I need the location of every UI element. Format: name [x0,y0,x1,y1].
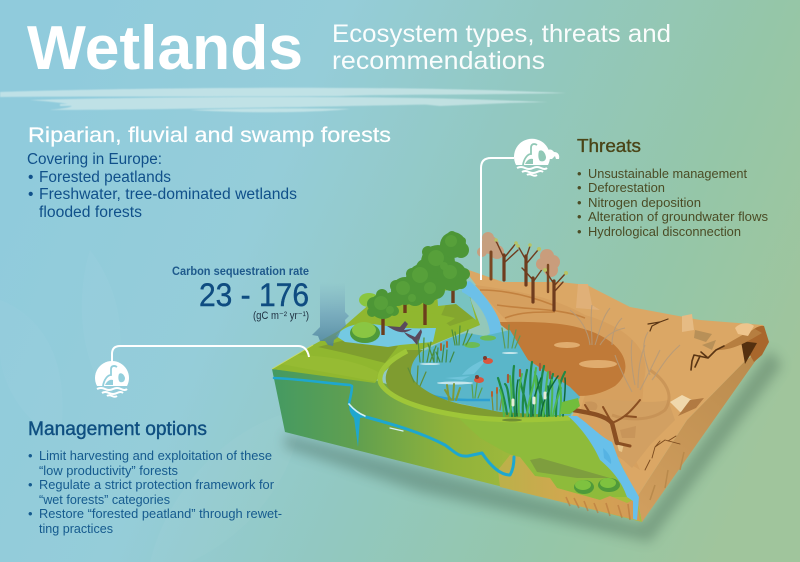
threats list: Hydrological disconnection [588,224,741,239]
carbon flow arrow [312,282,349,346]
subtitle: recommendations [332,47,545,75]
management list: • [28,448,33,463]
orange soil strip [498,455,640,521]
carbon sequestration callout: (gC m⁻² yr⁻¹) [253,310,309,322]
dry ridge shading [475,285,646,470]
pond [410,330,580,417]
upper meadow shadow [440,296,474,326]
dry grass tufts [570,305,680,392]
ducks [474,356,493,383]
ecosystem coverage list: • [28,186,33,203]
management list: Limit harvesting and exploitation of these [39,448,272,463]
olive bank [386,350,570,420]
lower cracked ground [590,400,675,468]
small reed clumps [408,325,520,410]
pink tree right [536,249,560,292]
ecosystem coverage list: Forested peatlands [39,169,171,186]
threats list: • [577,224,582,239]
bare tree six [543,268,568,310]
bare tree three [516,243,541,285]
pond highlights [420,352,518,384]
bush two [598,478,620,492]
front soil face [272,369,642,522]
right soil face [637,343,768,522]
cracked ground blobs [585,401,636,438]
light blue pool [336,324,436,347]
icon: management heron [95,361,129,397]
carbon sequestration callout [172,266,309,322]
background leaves [0,250,300,562]
threats heading: Threats [577,136,641,156]
ridge lines [480,290,585,318]
connector: management to block [112,346,309,362]
birds [387,321,422,345]
title: Wetlands [27,14,303,83]
block shadow [285,350,782,542]
eroded basin [497,322,625,396]
threats list: • [577,166,582,181]
corner bank [743,326,769,362]
left bush [350,322,380,343]
management list: • [28,477,33,492]
management list: • [28,506,33,521]
dry land surface [463,268,768,497]
brush stroke under title [0,88,566,112]
tree crowns [367,231,470,319]
soil lens [612,370,669,419]
ecosystem heading: Riparian, fluvial and swamp forests [28,123,391,147]
bright bank band [380,351,570,420]
bright green front shelf [452,412,637,500]
lower meadow stripe [282,355,378,382]
cracks [645,319,724,470]
crown highlights [374,235,457,314]
tall reeds [498,362,565,416]
back bush [359,293,379,307]
ecosystem coverage list: Freshwater, tree-dominated wetlands [39,186,297,203]
lily pads [464,335,496,348]
dead shrub [573,400,640,446]
threats list: Nitrogen deposition [588,195,701,210]
connector: threats to block [481,158,514,280]
dry trees [477,232,568,310]
management list: Restore “forested peatland” through rewet- [39,506,282,521]
management list: “wet forests” categories [39,492,170,507]
lily patch [560,398,580,414]
grass mound [370,312,455,328]
side grain [650,452,684,500]
pink tree left [477,232,504,279]
waterfall [568,416,639,520]
ecosystem coverage list: flooded forests [39,204,142,221]
threats list [577,166,769,239]
subtitle: Ecosystem types, threats and [332,20,671,48]
top left edge highlight [272,345,313,369]
rocks [576,284,754,452]
olive meadow band [318,340,398,363]
left meadow surface [272,285,480,383]
carbon sequestration callout: 23 - 176 [199,277,309,313]
forest pool [437,287,476,320]
ecosystem coverage list [27,151,297,221]
forest trees [367,231,470,335]
olive shadow patch [530,458,610,478]
threats list: • [577,180,582,195]
icon: threats heron [514,139,559,176]
threats list: • [577,195,582,210]
carbon sequestration callout: Carbon sequestration rate [172,266,309,278]
management list: ting practices [39,521,113,536]
bare tree four [524,268,543,302]
management list: “low productivity” forests [39,463,178,478]
corner root [712,329,762,352]
threats list: Alteration of groundwater flows [588,209,769,224]
ecosystem coverage list: • [28,169,33,186]
basin light patches [554,342,617,368]
threats list: Deforestation [588,180,665,195]
wetland block illustration [272,231,769,522]
threats list: Unsustainable management [588,166,747,181]
river upper [462,281,510,350]
pond deep edge [416,388,490,400]
subtitle [332,20,671,75]
wood grain [566,497,630,520]
management list [28,448,282,536]
dark corner notch [741,341,757,364]
bare tree two [494,238,518,280]
bush one [574,480,594,494]
tree trunks [383,280,453,335]
ecosystem coverage list: Covering in Europe: [27,151,162,168]
reed base shadow [502,418,522,422]
waterfall inner [603,448,611,464]
management heading: Management options [28,419,207,440]
underground water [274,378,514,475]
threats list: • [577,209,582,224]
management list: Regulate a strict protection framework for [39,477,275,492]
